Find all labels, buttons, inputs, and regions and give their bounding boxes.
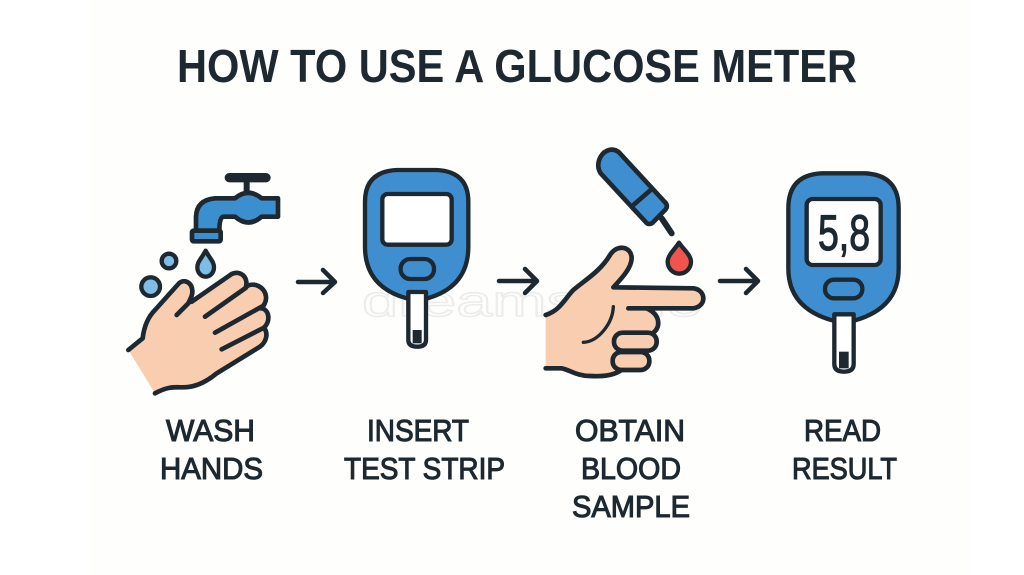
label: obtain blood sample: BLOOD [581,451,681,486]
arrow 1 [298,270,335,293]
test strip [408,292,426,347]
label: read result: READ [804,413,881,448]
meter screen [382,194,452,245]
meter reading: 5,8 [818,205,870,261]
icon: pointing hand [546,248,703,376]
arrow 2 [499,269,537,293]
label: obtain blood sample [572,413,690,524]
step 2: meter with test strip icon [365,170,468,347]
meter button [401,259,434,279]
label: read result [792,413,897,486]
label: wash hands: WASH [166,413,255,448]
step 4: meter reading result icon [788,173,899,372]
icon: blood drop [668,243,691,274]
label: obtain blood sample: SAMPLE [572,489,690,524]
meter button [825,280,862,298]
step 1: wash hands icon [128,178,278,393]
step 3: obtain blood sample icon [546,150,703,376]
meter body [365,170,468,298]
label: wash hands [160,413,263,486]
arrow 3 [720,269,758,293]
test strip [834,314,854,372]
label: wash hands: HANDS [160,451,263,486]
icon: hand [128,273,268,393]
label: insert test strip: INSERT [367,413,469,448]
label: read result: RESULT [792,451,897,486]
label: obtain blood sample: OBTAIN [575,413,685,448]
label: insert test strip [344,413,505,486]
icon: lancet [598,150,672,233]
label: insert test strip: TEST STRIP [344,451,505,486]
icon: water drops [141,251,214,296]
watermark: dreamstime [362,277,702,326]
icon: faucet [192,178,278,241]
title: HOW TO USE A GLUCOSE METER [177,40,857,92]
meter screen [807,199,881,265]
meter body [788,173,899,321]
